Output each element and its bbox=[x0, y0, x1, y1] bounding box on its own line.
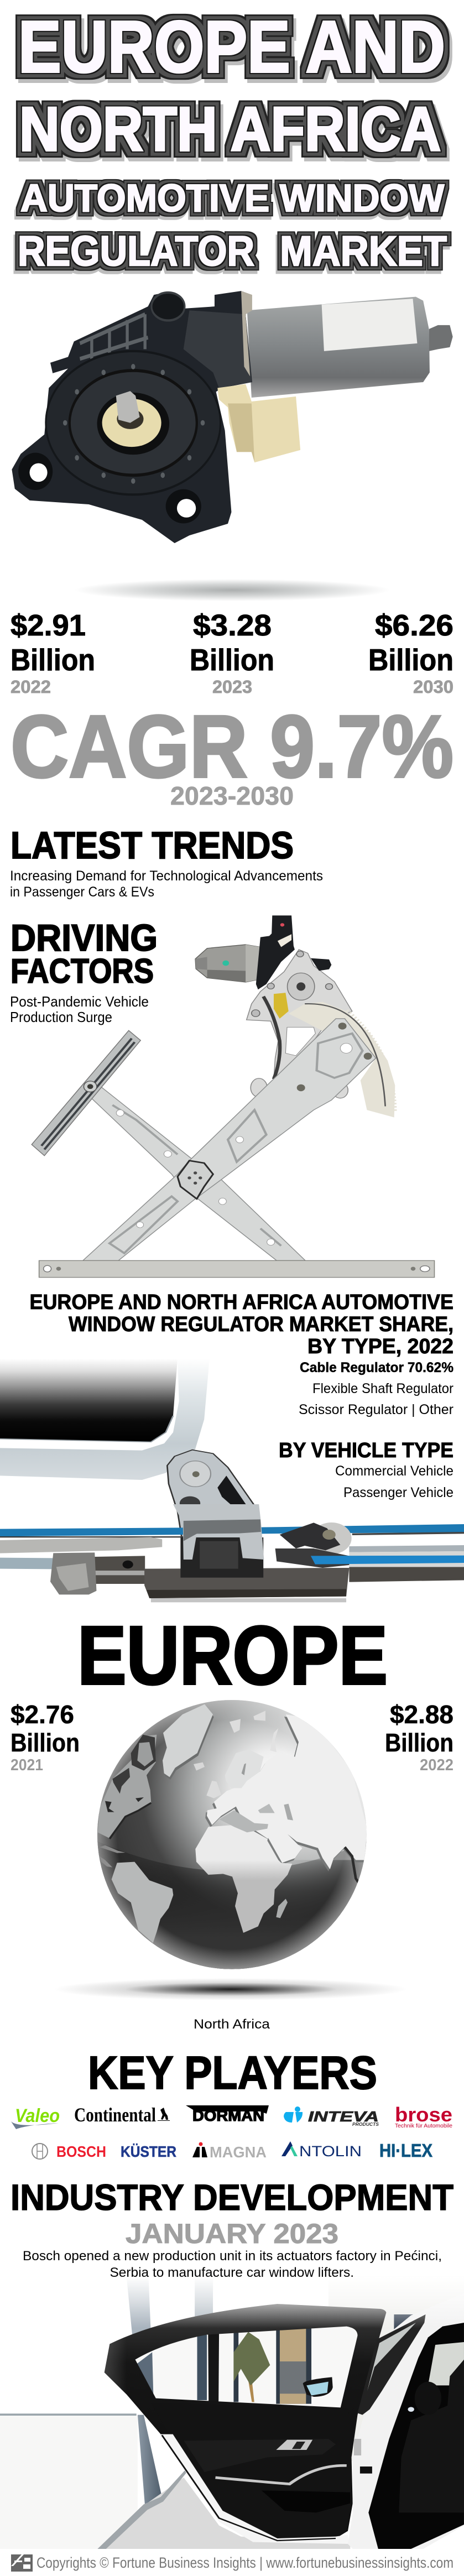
strip streaks bbox=[41, 1039, 134, 1150]
Mexico bbox=[100, 1857, 112, 1868]
glass far pillar bbox=[195, 2278, 213, 2334]
stat: 2022 bbox=[11, 609, 95, 697]
arm holes bbox=[116, 1044, 352, 1245]
globe clipped layers bbox=[94, 1698, 371, 1974]
unit: Billion bbox=[11, 1728, 80, 1757]
steering wheel bbox=[415, 2382, 441, 2415]
Continental wordmark: Continental bbox=[74, 2104, 156, 2126]
motor end cap bbox=[246, 945, 260, 982]
black connector bbox=[256, 915, 295, 989]
motor tip bbox=[195, 957, 207, 970]
door pillar strip bbox=[208, 2333, 219, 2402]
upper bolts bbox=[252, 951, 332, 1016]
Novaya Zemlya bbox=[270, 1728, 278, 1752]
share list bbox=[299, 1360, 453, 1417]
Arctic dark islands bbox=[131, 1735, 156, 1771]
South America bbox=[112, 1862, 173, 1943]
stat: 2022 Europe bbox=[385, 1700, 453, 1774]
Africa bbox=[195, 1825, 292, 1933]
main block lower bbox=[147, 1589, 346, 1598]
title line: REGULATOR MARKET bbox=[18, 228, 447, 275]
mirror glass bbox=[306, 2382, 329, 2396]
Magna emblem dot bbox=[199, 2142, 202, 2146]
driving factors text: Production Surge bbox=[10, 1009, 112, 1025]
door pocket bbox=[262, 2490, 350, 2512]
motor body shade bbox=[207, 970, 260, 982]
wall right bbox=[329, 2277, 464, 2461]
value: $2.88 bbox=[390, 1700, 453, 1729]
globe sphere bbox=[97, 1700, 367, 1969]
heading: latest trends: LATEST TRENDS bbox=[11, 824, 294, 867]
Eurasia shadow bbox=[205, 1717, 366, 1871]
dark window glass bbox=[0, 1359, 178, 1442]
center hinge bbox=[200, 1541, 238, 1569]
value: $2.91 bbox=[11, 609, 86, 642]
pillar lower bbox=[138, 2415, 162, 2506]
right rim light bbox=[295, 1746, 366, 1860]
pillar upper bbox=[127, 2278, 152, 2365]
Mediterranean bbox=[220, 1810, 268, 1832]
bottom bar hole left bbox=[44, 1265, 51, 1272]
footer logo bbox=[11, 2554, 33, 2572]
metal shaft bbox=[116, 391, 140, 423]
driving factors text bbox=[10, 993, 149, 1025]
track bbox=[95, 1556, 145, 1584]
image: window regulator motor bbox=[12, 291, 453, 543]
pulley bracket bbox=[167, 1450, 262, 1548]
block shadow bbox=[151, 1598, 346, 1602]
heading: market share by type: BY TYPE, 2022 bbox=[307, 1335, 453, 1358]
BMW badge bbox=[408, 2407, 414, 2412]
Greenland bbox=[163, 1704, 213, 1777]
Baltic bbox=[242, 1763, 246, 1775]
arm: top-left to bottom-right bbox=[84, 1084, 305, 1260]
North America coast shadow bbox=[110, 1803, 151, 1839]
red dot bbox=[280, 923, 284, 926]
window scene blue post bbox=[197, 2335, 207, 2400]
cream gear bbox=[102, 399, 161, 447]
Inteva products: PRODUCTS bbox=[352, 2122, 379, 2127]
green dot bbox=[222, 961, 229, 966]
motor white label bbox=[322, 299, 417, 351]
grey rope bbox=[0, 1537, 162, 1553]
year: 2022 bbox=[420, 1756, 453, 1774]
blue rope left bbox=[0, 1527, 184, 1536]
cream connector bbox=[217, 384, 300, 462]
rivets bbox=[297, 1023, 372, 1091]
motor cylinder bbox=[247, 297, 430, 398]
pivot center bbox=[296, 982, 305, 991]
motor ground shadow bbox=[75, 579, 390, 601]
lower lobe right bbox=[332, 1082, 348, 1098]
center studs bbox=[187, 1171, 202, 1185]
Madagascar bbox=[276, 1899, 288, 1918]
image: rail, ropes and block bbox=[0, 1504, 464, 1602]
North America bbox=[98, 1735, 157, 1838]
Black Sea bbox=[258, 1804, 275, 1813]
door panel bbox=[151, 2403, 352, 2540]
logo: Hi-Lex: HI·LEX bbox=[379, 2140, 432, 2161]
center mount bbox=[180, 1537, 263, 1578]
floor rail bbox=[97, 2470, 186, 2549]
Arctic light patch bbox=[137, 1742, 153, 1766]
Inteva emblem bbox=[284, 2112, 303, 2123]
Magna emblem bbox=[192, 2147, 207, 2157]
mount hole right center bbox=[177, 499, 196, 518]
icon: globe bbox=[94, 1698, 371, 1974]
door edge dark line bbox=[162, 2435, 336, 2541]
lower hemisphere shade bbox=[94, 1840, 371, 1974]
Antolin emblem bbox=[281, 2141, 293, 2156]
unit: Billion bbox=[190, 643, 274, 677]
window cutout bbox=[285, 1028, 315, 1056]
connector shade bbox=[228, 404, 254, 462]
black housing bbox=[12, 291, 252, 543]
Eurasia bbox=[207, 1714, 367, 1869]
bracket lower metal bbox=[173, 1504, 264, 1560]
lower lobes bbox=[251, 1078, 267, 1097]
image: open car door bbox=[0, 2277, 464, 2549]
title line: REGULATOR MARKET: REGULATOR bbox=[18, 228, 254, 275]
back dark square bbox=[394, 2314, 416, 2334]
car interior bbox=[368, 2323, 464, 2549]
Antolin emblem teal bbox=[290, 2146, 298, 2156]
Continental horse bbox=[158, 2108, 170, 2121]
right rail lower bbox=[349, 1551, 464, 1567]
round disc bbox=[46, 351, 221, 494]
stat: 2021 bbox=[11, 1700, 80, 1774]
stat: 2023 bbox=[190, 609, 274, 697]
housing grey sheen bbox=[184, 310, 252, 388]
Magna wordmark: MAGNA bbox=[210, 2144, 267, 2161]
logo square bbox=[11, 2554, 33, 2572]
unit: Billion bbox=[385, 1728, 453, 1757]
car body white bbox=[348, 2293, 464, 2549]
Bosch emblem bbox=[32, 2144, 48, 2159]
bracket lower dark bbox=[184, 1519, 261, 1541]
door hinge bbox=[354, 2439, 361, 2455]
bracket bolt center bbox=[192, 1471, 200, 1477]
latest trends text: in Passenger Cars & EVs bbox=[10, 884, 154, 900]
door check strap bbox=[360, 2467, 372, 2474]
interior window bbox=[428, 2342, 464, 2385]
left fade bbox=[0, 2277, 127, 2413]
top-left strip bbox=[32, 1030, 140, 1156]
strip joint bbox=[84, 1081, 97, 1092]
unit: Billion bbox=[368, 643, 453, 677]
bottom bar rivets bbox=[56, 1267, 415, 1271]
image: window frame and cable regulator bbox=[0, 1359, 262, 1548]
Caspian Sea bbox=[284, 1804, 293, 1821]
logo: Kuster: KÜSTER bbox=[121, 2143, 176, 2160]
right dark line bbox=[352, 1532, 464, 1535]
year: 2022 bbox=[11, 677, 51, 697]
end stop bbox=[50, 1552, 96, 1594]
logo: Bosch bbox=[32, 2143, 106, 2160]
value: $2.76 bbox=[11, 1700, 74, 1729]
bracket lower slot bbox=[180, 1496, 200, 1510]
mount hole left center bbox=[30, 463, 48, 482]
Brose wordmark: brose bbox=[395, 2103, 452, 2126]
bottom bar bbox=[39, 1260, 434, 1277]
window scene bbox=[135, 2327, 358, 2407]
pulley bolt bbox=[322, 1530, 336, 1540]
heading: Europe: EUROPE bbox=[77, 1609, 388, 1702]
bottom rim light bbox=[97, 1699, 367, 1969]
horizontal line bbox=[0, 2413, 137, 2416]
pulley cheek bbox=[280, 1522, 340, 1550]
logo: Continental bbox=[74, 2104, 170, 2126]
door handle bbox=[276, 2440, 312, 2450]
motor body bbox=[195, 945, 260, 982]
plant foliage bbox=[233, 2332, 270, 2385]
pivot bbox=[288, 973, 315, 1000]
logo cut bbox=[11, 2554, 30, 2569]
bottom bar hole right bbox=[420, 1266, 430, 1272]
logo: Inteva bbox=[284, 2106, 379, 2127]
yellow patch bbox=[274, 993, 289, 1019]
right black stub bbox=[311, 958, 331, 971]
strip joint center bbox=[87, 1084, 93, 1089]
arm embossing bbox=[110, 1034, 362, 1253]
gear arc bbox=[305, 1004, 385, 1106]
heading: market share by type bbox=[30, 1291, 453, 1358]
Svalbard bbox=[230, 1719, 241, 1733]
Scandinavia bbox=[225, 1749, 264, 1788]
Valeo swoosh bbox=[11, 2121, 59, 2129]
gear teeth bbox=[346, 1011, 394, 1113]
window scene doorway bright bbox=[280, 2327, 306, 2404]
development text: Serbia to manufacture car window lifters. bbox=[110, 2265, 354, 2280]
Greenland shadow bbox=[167, 1715, 214, 1780]
development text bbox=[23, 2249, 442, 2280]
Brose tagline: Technik für Automobile bbox=[395, 2123, 452, 2129]
dark line under rope bbox=[0, 1536, 184, 1537]
background wall bbox=[0, 2277, 464, 2549]
logo: Magna bbox=[192, 2142, 267, 2161]
year: 2021 bbox=[11, 1756, 43, 1774]
logo: Valeo bbox=[11, 2105, 60, 2129]
mirror bbox=[303, 2377, 333, 2397]
left rail band bbox=[0, 1558, 53, 1569]
interior seat bbox=[399, 2360, 464, 2512]
Caribbean islands bbox=[100, 1845, 126, 1853]
mount hole right bbox=[166, 489, 201, 523]
logo: Antolin bbox=[281, 2141, 362, 2160]
bracket bolt bbox=[180, 1461, 211, 1487]
Dorman wordmark: DORMAN bbox=[192, 2107, 264, 2124]
door frame bbox=[105, 2304, 386, 2541]
end stop light patch bbox=[56, 1563, 89, 1591]
heading: driving factors bbox=[11, 917, 158, 990]
motor shaft end bbox=[429, 325, 453, 351]
driving factors text: Post-Pandemic Vehicle bbox=[10, 993, 149, 1010]
rear door glass surround bbox=[358, 2314, 426, 2415]
share: flexible shaft regulator: Flexible Shaft Regulator bbox=[312, 1381, 453, 1396]
heading: driving factors: DRIVING bbox=[11, 917, 158, 959]
rear glass pane bbox=[367, 2323, 416, 2391]
title bbox=[18, 6, 447, 275]
Hudson Bay bbox=[112, 1768, 130, 1793]
year: 2030 bbox=[413, 677, 453, 697]
Dorman wings bbox=[186, 2105, 269, 2114]
Valeo wordmark: Valeo bbox=[15, 2105, 60, 2126]
disc dots bbox=[63, 364, 205, 484]
window scene dark frame bbox=[233, 2329, 238, 2402]
Southeast Asia shadow bbox=[345, 1847, 359, 1884]
door handle dark bbox=[292, 2442, 305, 2449]
Bosch emblem armature bbox=[37, 2145, 43, 2158]
globe shadow bbox=[54, 1978, 408, 2000]
track highlight bbox=[95, 1571, 145, 1575]
right rail dark bbox=[349, 1567, 464, 1582]
housing ribs bbox=[80, 314, 148, 361]
pulley wheel bbox=[311, 1522, 352, 1554]
frame inner edge bbox=[0, 1416, 173, 1442]
top fade bbox=[0, 2277, 464, 2328]
label: North Africa: North Africa bbox=[194, 2017, 270, 2032]
CAGR period: 2023-2030 bbox=[170, 781, 294, 810]
vehicle list: Passenger Vehicle bbox=[343, 1485, 453, 1500]
mount hole top bbox=[152, 293, 185, 320]
share: scissor regulator and other: Scissor Regulator | Other bbox=[299, 1402, 453, 1417]
sector gear bbox=[289, 1002, 395, 1118]
right rail band bbox=[349, 1545, 464, 1552]
arm: bottom-left to upper-right bbox=[83, 1019, 376, 1260]
center gear recess bbox=[97, 393, 169, 455]
year: 2023 bbox=[212, 677, 252, 697]
Britain bbox=[206, 1781, 221, 1798]
Red Sea bbox=[267, 1838, 281, 1863]
Inteva dot bbox=[295, 2106, 300, 2112]
logo: Brose bbox=[395, 2103, 452, 2129]
value: $3.28 bbox=[193, 609, 272, 642]
window scene cars bbox=[280, 2361, 306, 2394]
bracket dark fold bbox=[263, 997, 280, 1079]
door armrest bbox=[184, 2439, 336, 2472]
gear hole bbox=[117, 409, 144, 429]
image: scissor window regulator bbox=[32, 915, 434, 1277]
Great Lakes bbox=[105, 1797, 144, 1812]
value: $6.26 bbox=[375, 609, 453, 642]
Antolin wordmark: NTOLIN bbox=[299, 2143, 362, 2160]
track hole bbox=[123, 1561, 133, 1568]
center pivot plate bbox=[178, 1161, 213, 1199]
latest trends text: Increasing Demand for Technological Advancements bbox=[10, 868, 323, 884]
window scene left pillar bbox=[135, 2352, 153, 2397]
latest trends text bbox=[10, 868, 323, 900]
connector cream clip bbox=[278, 934, 291, 947]
logo: Dorman bbox=[186, 2105, 269, 2124]
bracket dark slot bbox=[217, 1475, 247, 1510]
unit: Billion bbox=[11, 643, 95, 677]
blue rope lower bbox=[311, 1556, 464, 1565]
Inteva wordmark: INTEVA bbox=[308, 2108, 379, 2125]
development date: JANUARY 2023 bbox=[126, 2218, 338, 2249]
ground left bbox=[0, 2416, 138, 2549]
floor bbox=[97, 2478, 350, 2549]
main block bbox=[144, 1568, 349, 1598]
silver trim bbox=[215, 2465, 347, 2484]
silver frame bbox=[0, 1359, 210, 1480]
heading: driving factors: FACTORS bbox=[11, 952, 154, 990]
vehicle list bbox=[335, 1463, 453, 1500]
heading: key players: KEY PLAYERS bbox=[88, 2047, 377, 2099]
stat: 2030 bbox=[368, 609, 453, 697]
white door edge bbox=[161, 2434, 349, 2544]
mount hole left bbox=[18, 453, 53, 490]
blue rope right bbox=[260, 1524, 464, 1534]
heading: by vehicle type: BY VEHICLE TYPE bbox=[279, 1439, 453, 1462]
disc ring bbox=[70, 371, 197, 475]
Iceland bbox=[194, 1762, 205, 1771]
Franz Josef Land bbox=[253, 1711, 265, 1721]
title line: AUTOMOTIVE WINDOW: AUTOMOTIVE WINDOW bbox=[20, 176, 444, 220]
Bosch wordmark: BOSCH bbox=[56, 2143, 106, 2160]
share: cable regulator: Cable Regulator 70.62% bbox=[300, 1360, 453, 1375]
development text: Bosch opened a new production unit in its actuators factory in Pećinci, bbox=[23, 2249, 442, 2264]
footer bbox=[11, 2554, 453, 2572]
title line: REGULATOR MARKET: MARKET bbox=[280, 228, 447, 275]
lower pulley bbox=[275, 1548, 349, 1568]
window scene doorway dark bbox=[276, 2327, 311, 2404]
motor metal clip bbox=[241, 291, 252, 376]
bracket bbox=[247, 950, 352, 1081]
plant trunk bbox=[248, 2380, 254, 2402]
vehicle list: Commercial Vehicle bbox=[335, 1463, 453, 1479]
